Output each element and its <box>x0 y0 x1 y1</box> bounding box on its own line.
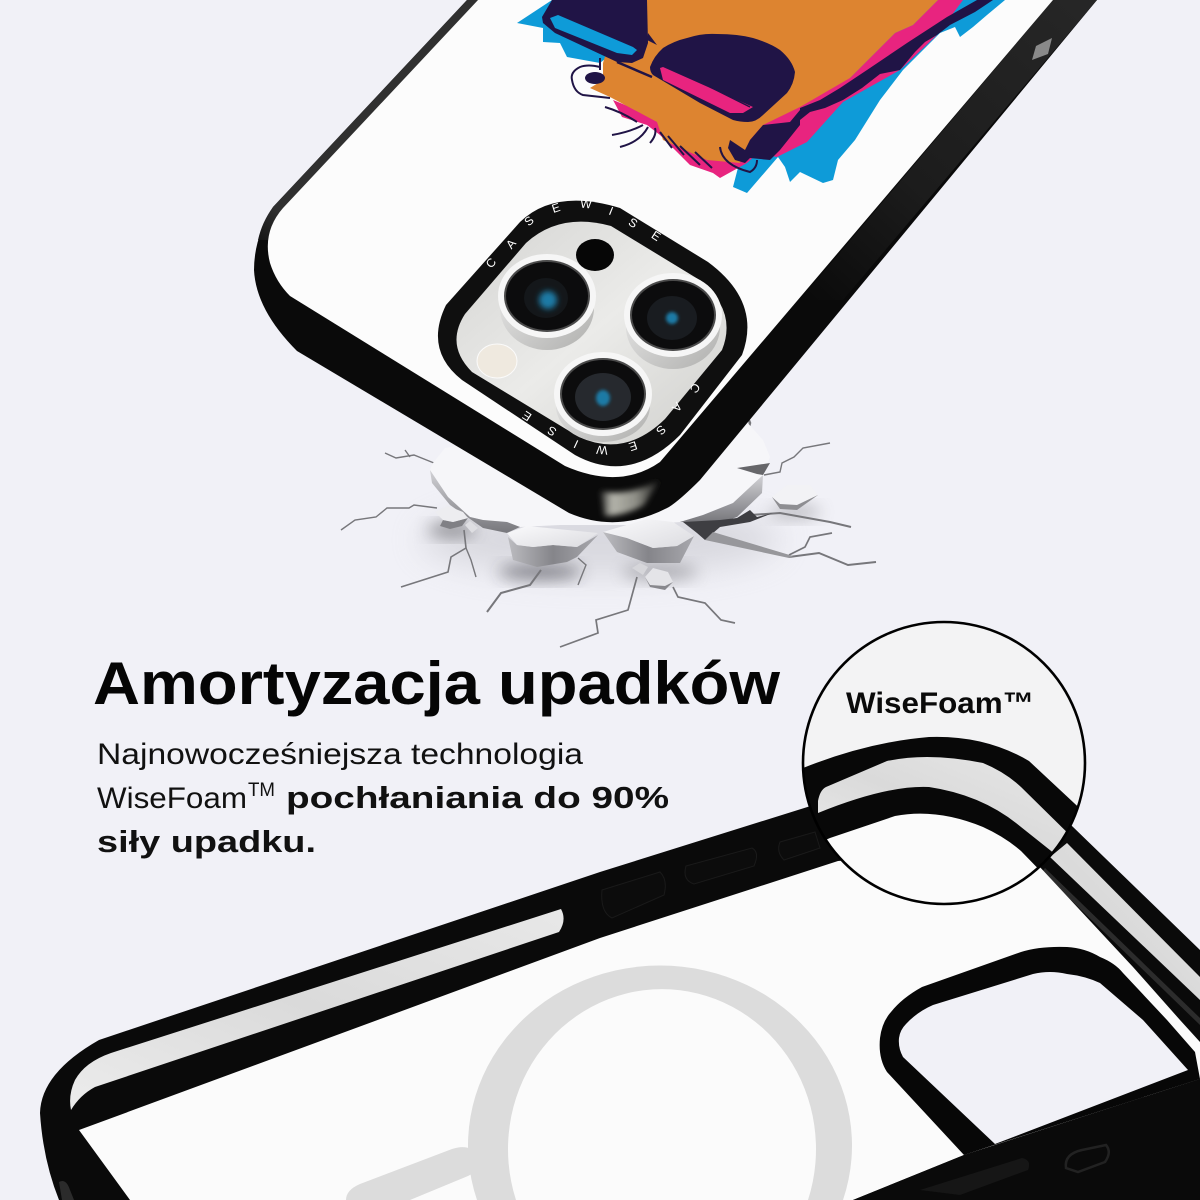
flash <box>477 344 517 378</box>
clear back panel <box>79 850 1200 1200</box>
camera plate <box>456 222 727 444</box>
CASEWISE lettering bottom: W <box>595 442 608 457</box>
foam channel left <box>70 909 564 1110</box>
center right chunk <box>603 532 694 563</box>
magnifier callout <box>800 620 1088 920</box>
CASEWISE lettering top: A <box>503 236 519 252</box>
body text: pochłaniania do 90% <box>286 780 669 815</box>
CASEWISE lettering bottom: I <box>572 437 580 451</box>
artwork: blue paint left <box>517 0 610 63</box>
thin left edge <box>258 0 478 240</box>
camera cutout frame <box>880 947 1200 1155</box>
case outer bumper <box>40 767 1200 1200</box>
top phone case <box>254 0 1097 522</box>
camera cutout opening <box>899 972 1188 1144</box>
side button glint <box>1032 38 1052 60</box>
CASEWISE lettering top: C <box>483 255 499 271</box>
case black bumper <box>254 0 1097 522</box>
bottom edge button <box>920 1158 1029 1195</box>
magnified corner <box>804 736 1077 868</box>
artwork: navy fur <box>800 0 993 120</box>
lens 3 <box>554 352 652 442</box>
bottom bumper band <box>853 1079 1200 1200</box>
magnifier label: WiseFoam™ <box>846 687 1034 720</box>
heading: Amortyzacja upadków <box>93 650 780 717</box>
small chunks left <box>440 518 468 529</box>
artwork: glasses bridge <box>617 62 652 77</box>
camera island ring <box>438 201 747 466</box>
inner band sheen <box>1042 868 1200 1025</box>
side buttons <box>602 832 820 918</box>
magnifier outline <box>803 622 1085 904</box>
lens 1 <box>498 254 596 350</box>
MagSafe bar <box>346 1147 480 1200</box>
CASEWISE lettering top: W <box>580 197 593 212</box>
CASEWISE lettering bottom: S <box>653 422 669 438</box>
artwork: left sunglass lens <box>542 0 657 63</box>
bottom edge slot <box>1066 1145 1109 1172</box>
CASEWISE lettering top: S <box>521 213 537 229</box>
body text: Najnowocześniejsza technologia <box>97 738 583 771</box>
bottom phone case <box>40 767 1200 1200</box>
CASEWISE lettering bottom: S <box>545 423 559 439</box>
CASEWISE lettering bottom: E <box>520 408 534 424</box>
CASEWISE lettering bottom: C <box>687 380 703 396</box>
left charging slot <box>59 1181 74 1200</box>
CASEWISE lettering top: E <box>550 200 562 216</box>
CASEWISE lettering top: I <box>607 204 615 218</box>
body text <box>97 738 669 859</box>
CASEWISE lettering top: S <box>626 215 640 231</box>
artwork: nose and whiskers <box>572 58 757 172</box>
microphone hole <box>576 239 614 271</box>
main slabs <box>430 420 770 527</box>
artwork: blue paint right <box>733 0 1005 193</box>
cracked ground impact <box>341 413 876 647</box>
lens 2 <box>624 273 722 369</box>
right side edge <box>800 0 1097 300</box>
MagSafe ring <box>468 966 852 1200</box>
CASEWISE lettering top <box>483 197 663 271</box>
body text: WiseFoam <box>97 782 247 815</box>
artwork: right sunglass lens <box>650 34 795 122</box>
body text: siły upadku. <box>97 824 316 859</box>
small chunks bottom <box>632 563 648 575</box>
artwork: nostril and dark fur <box>728 110 800 163</box>
center left chunk <box>508 535 598 567</box>
foam channel right <box>1050 843 1200 1000</box>
body text: TM <box>248 780 275 801</box>
CASEWISE lettering bottom: A <box>669 399 685 415</box>
artwork: orange face <box>590 0 938 163</box>
bumper gloss highlight <box>600 480 660 516</box>
case white back <box>268 0 1053 477</box>
CASEWISE lettering top: E <box>649 228 663 244</box>
artwork: pink fur <box>613 0 963 178</box>
right floating chunk <box>772 495 818 510</box>
CASEWISE lettering bottom: E <box>627 438 639 454</box>
CASEWISE lettering bottom <box>520 380 703 457</box>
